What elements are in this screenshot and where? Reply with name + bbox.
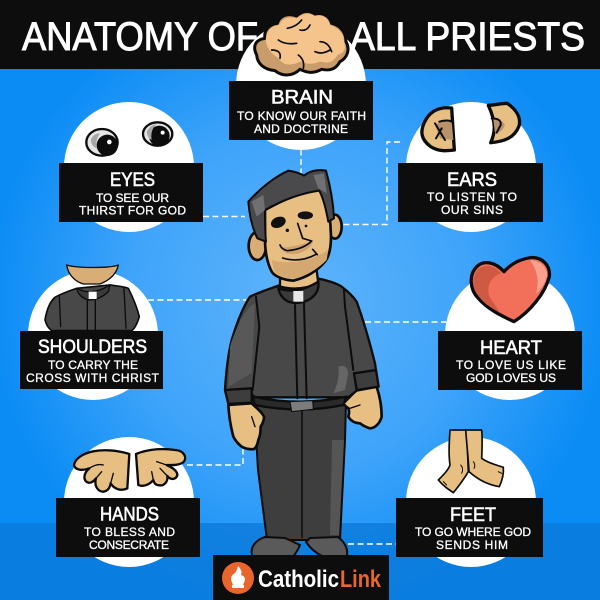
panel: brain: TO KNOW OUR FAITH [237, 109, 366, 123]
panel: brain [229, 11, 373, 150]
panel: feet: FEET [450, 505, 496, 526]
panel: shoulders [20, 265, 163, 400]
title [22, 15, 585, 59]
upper body [225, 170, 382, 449]
icon: eyes [86, 122, 172, 156]
panel: feet [396, 430, 543, 567]
icon: logo flame badge [222, 562, 254, 594]
icon: brain [255, 11, 348, 75]
logo box [213, 555, 389, 600]
panel: hands: TO BLESS AND [84, 525, 175, 539]
panel: shoulders: CROSS WITH CHRIST [26, 371, 160, 385]
logo box: Link [340, 566, 382, 593]
icon: heart [471, 258, 549, 322]
icon: feet [438, 430, 503, 493]
panel: feet: SENDS HIM [436, 538, 508, 552]
panel: ears [398, 102, 543, 232]
panel: heart [438, 258, 582, 400]
panel: hands: CONSECRATE [89, 538, 169, 552]
panel: heart: TO LOVE US LIKE [456, 358, 566, 372]
panel: feet: TO GO WHERE GOD [415, 525, 531, 539]
panel: ears: EARS [447, 170, 497, 191]
dashed connectors [148, 140, 446, 544]
panel: ears: OUR SINS [441, 203, 503, 217]
icon: hands [74, 449, 185, 492]
logo box: Catholic [258, 566, 339, 593]
panel: ears: TO LISTEN TO [427, 190, 517, 204]
priest figure [225, 170, 382, 563]
title: ANATOMY OF [22, 15, 258, 59]
header band [0, 0, 600, 69]
panel: heart: GOD LOVES US [466, 371, 556, 385]
panel: eyes: THIRST FOR GOD [79, 204, 186, 218]
panel: eyes [59, 102, 203, 232]
panel: heart: HEART [480, 338, 542, 359]
title: ALL PRIESTS [350, 15, 585, 59]
icon: ears [422, 103, 520, 151]
panel: brain: BRAIN [271, 88, 333, 108]
panel: shoulders: SHOULDERS [38, 337, 147, 358]
panel: eyes: TO SEE OUR [96, 191, 169, 205]
panel: hands [56, 437, 200, 567]
icon: shoulders [45, 265, 139, 331]
panel: shoulders: TO CARRY THE [48, 358, 138, 372]
panel: eyes: EYES [110, 170, 155, 191]
pants and shoes [252, 402, 347, 563]
panel: hands: HANDS [100, 504, 159, 526]
panel: brain: AND DOCTRINE [254, 122, 348, 136]
